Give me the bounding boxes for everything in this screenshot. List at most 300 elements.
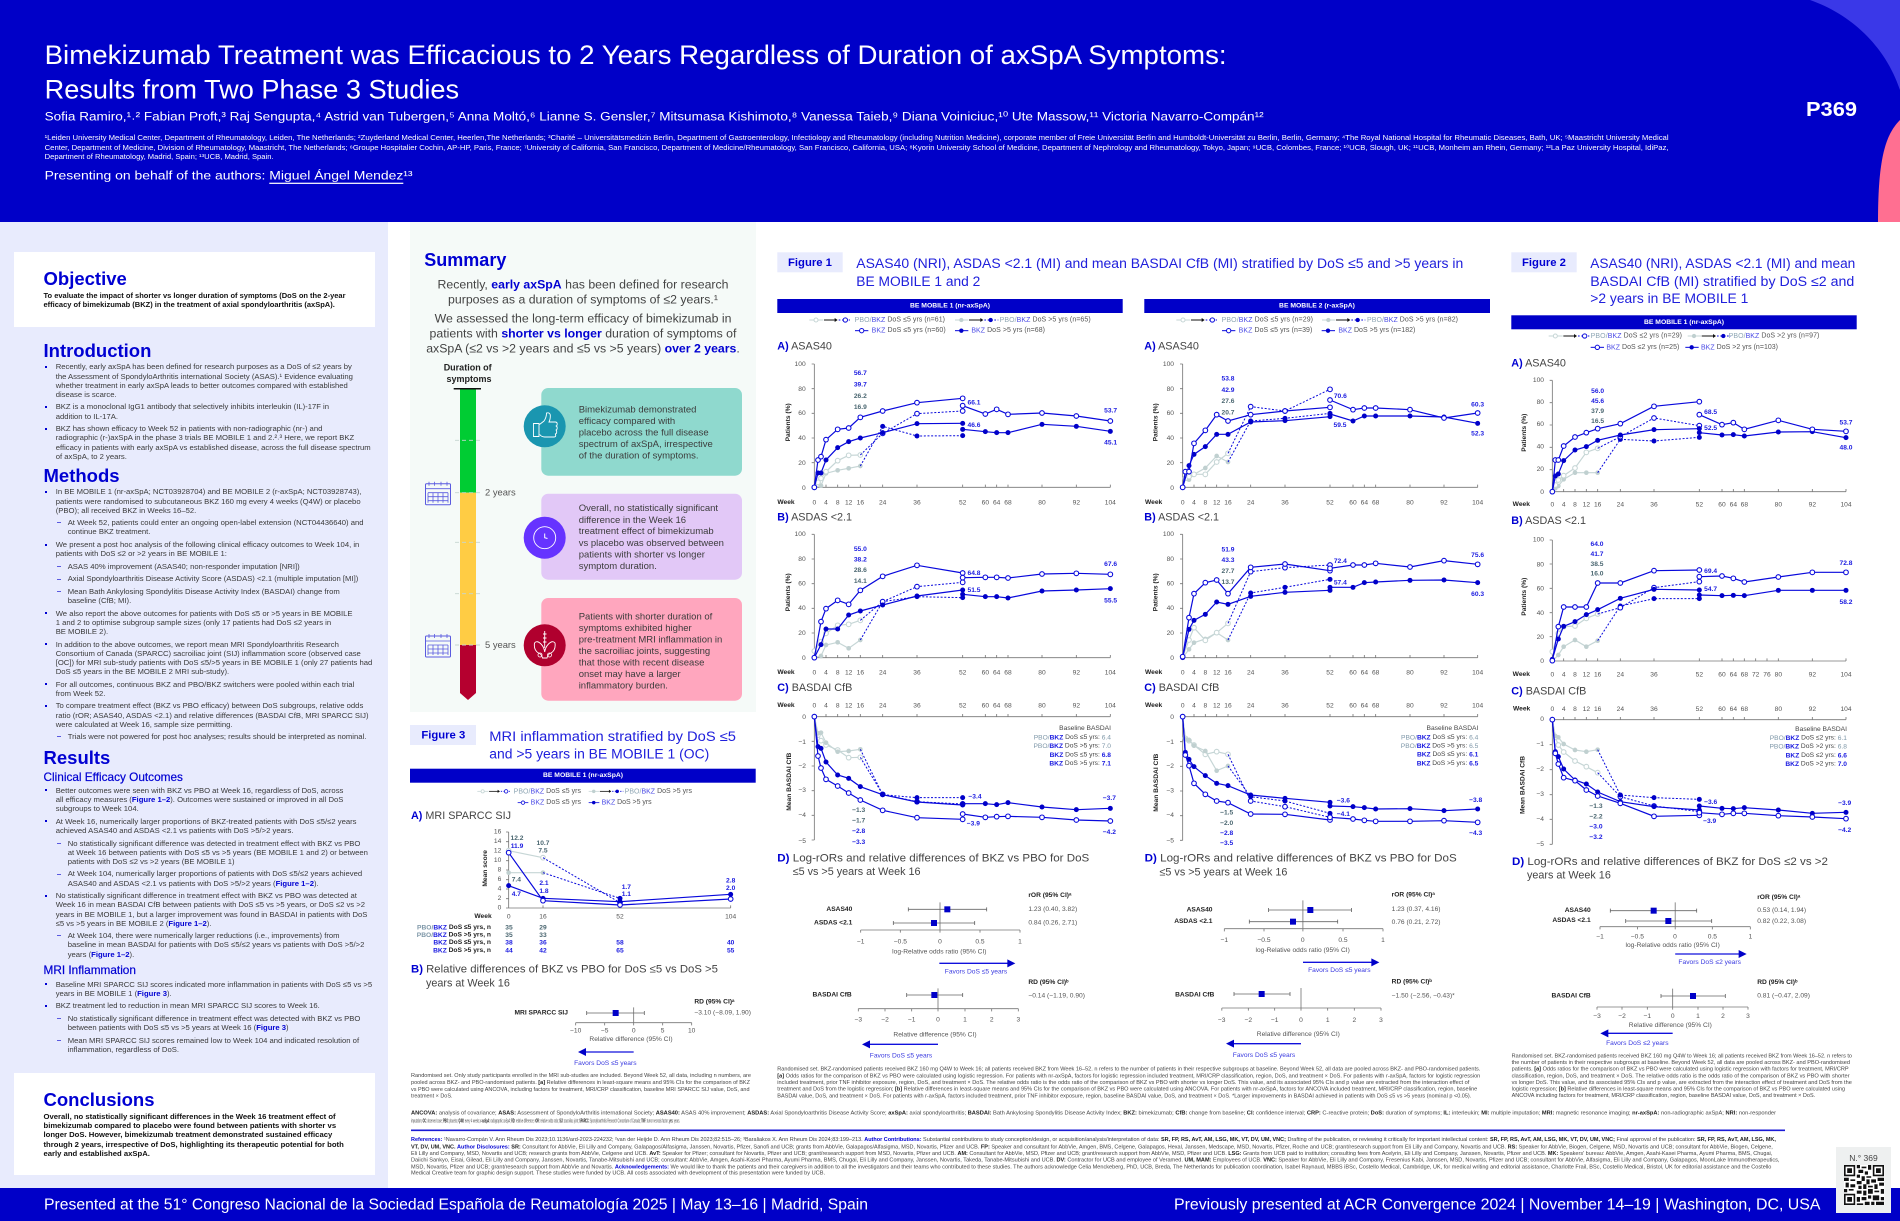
chart: fig 1 BE MOBILE 1 ASDAS: 24	[879, 669, 887, 676]
chart: fig 1 BE MOBILE 1 ASAS40: 20	[798, 460, 806, 467]
figure 1 title	[856, 256, 1463, 289]
forest plot: fig 1 BE MOBILE 1: ASAS40	[826, 906, 853, 913]
figure 1 tag	[777, 252, 843, 272]
chart: fig 2 ASAS40: 12	[1583, 501, 1590, 508]
references and disclosures	[411, 1137, 1780, 1177]
chart: fig 2 BASDAI: PBO/BKZ DoS ≤2 yrs: 6.1	[1770, 734, 1847, 741]
forest plot: fig 1 BE MOBILE 2: Relative difference (95% CI)	[1257, 1031, 1340, 1038]
forest plot: figure 2: −3	[1593, 1012, 1601, 1019]
chart: fig 1 BE MOBILE 1 ASAS40: 66.1	[968, 399, 981, 406]
callout: efficacy: placebo across the full disease	[579, 428, 709, 438]
forest plot: fig 1 BE MOBILE 1: ASDAS <2.1	[814, 919, 853, 926]
figure 3 title: MRI inflammation stratified by DoS ≤5	[489, 729, 736, 744]
footnote: figure 3: vs PBO were calculated using ANCOVA, including factors for treatment, MRI/CRP classification, baseline MRI SPARCC SIJ value, DoS, and	[411, 1087, 750, 1093]
chart: fig 1 BE MOBILE 1 ASDAS: 4	[824, 669, 828, 676]
chart: fig 2 BASDAI: BKZ DoS >2 yrs: 7.0	[1785, 760, 1847, 767]
chart: fig 2 ASDAS: 58.2	[1840, 599, 1853, 606]
chart: fig 1 BE MOBILE 2 BASDAI: 16	[1224, 702, 1232, 709]
table: n per group	[417, 924, 735, 954]
forest plot: figure 3: −5	[601, 1027, 609, 1034]
chart: fig 2 ASDAS: 72	[1752, 671, 1760, 678]
chart: fig 2 ASDAS: 40	[1537, 610, 1544, 617]
chart: fig 1 BE MOBILE 2 ASDAS: 72.4	[1334, 558, 1347, 565]
chart: MRI SPARCC SIJ: 7.4	[512, 876, 521, 883]
chart: fig 1 BE MOBILE 2 BASDAI: −3.5	[1220, 840, 1234, 847]
chart: fig 1 BE MOBILE 2 ASAS40: 20	[1167, 460, 1174, 467]
chart: fig 1 BE MOBILE 1 ASDAS: 64.8	[968, 570, 981, 577]
forest plot: fig 1 BE MOBILE 1: 3	[1016, 1016, 1020, 1023]
chart: fig 1 BE MOBILE 2 ASAS40: 20.7	[1222, 409, 1235, 416]
legend: figure 3	[477, 788, 692, 806]
forest plot: figure 3: Relative difference (95% CI)	[589, 1036, 673, 1043]
forest plot: figure 2: 3	[1746, 1012, 1750, 1019]
chart: fig 1 BE MOBILE 1 BASDAI: −2.8	[852, 828, 866, 835]
forest plot: fig 1 BE MOBILE 2: −2	[1245, 1016, 1252, 1023]
chart: MRI SPARCC SIJ: 2.1	[539, 880, 549, 887]
panel: summary background	[410, 222, 756, 712]
forest plot: fig 1 BE MOBILE 1: 1	[1018, 938, 1022, 945]
chart: fig 2 ASAS40: Week	[1513, 501, 1530, 508]
text: clinical efficacy bullets: all efficacy measures (Figure 1–2). Outcomes were sustained or improved in all DoS	[56, 795, 343, 804]
chart: fig 2 ASDAS: 64.0	[1591, 541, 1604, 548]
forest plot: fig 1 BE MOBILE 2: 0	[1299, 1016, 1303, 1023]
affiliations	[45, 135, 1669, 161]
timeline: duration of symptoms: symptoms	[446, 374, 492, 384]
chart: fig 1 BE MOBILE 2 BASDAI: −3.6	[1337, 797, 1350, 804]
footnote: figure 1: treatment and DoS from the logistic regression; [b] Relative differences in least-square means and 95% CIs for the comparison of BKZ vs PBO were calculated using ANCOVA. For patients with nr-axSpA, factors for ANCOVA included treatment, MRI/CRP classification, region, baseline	[777, 1087, 1477, 1093]
chart: fig 2 ASAS40: 56.0	[1591, 388, 1604, 395]
table: n per group: 42	[539, 947, 547, 954]
text: methods bullets: from Week 52.	[56, 689, 105, 698]
chart: fig 1 BE MOBILE 1 ASDAS: 52	[959, 669, 967, 676]
footnote: figure 2: Randomised set. BKZ-randomised patients received BKZ 160 mg Q4W to Week 16; all patients received BKZ from Week 16–52. n refers to	[1512, 1053, 1852, 1059]
chart: MRI SPARCC SIJ: 1.8	[539, 888, 549, 895]
legend: figure 2: PBO/BKZ DoS ≤2 yrs (n=29)	[1591, 332, 1682, 339]
text: methods bullets: ratio (rOR; ASAS40, ASDAS <2.1) and relative differences (BASDAI CfB, MRI SPARCC SIJ)	[56, 711, 369, 720]
chart: MRI SPARCC SIJ: 52	[616, 913, 624, 920]
heading: fig 2 A ASAS40: A) ASAS40	[1511, 357, 1566, 369]
legend: BE MOBILE 1: BKZ DoS >5 yrs (n=68)	[971, 327, 1045, 334]
text: clinical efficacy bullets: ≤5 vs >5 years in BE MOBILE 2 (Figure 1–2).	[56, 919, 211, 928]
text: methods bullets: We present a post hoc analysis of the following clinical efficacy outcomes to Week 104, in	[56, 540, 359, 549]
chart: fig 1 BE MOBILE 2 BASDAI: 24	[1247, 702, 1255, 709]
forest plot: figure 2: 1	[1696, 1012, 1700, 1019]
chart: fig 1 BE MOBILE 2 ASAS40: 60.3	[1471, 401, 1484, 408]
footnote: figure 2: logistic regression; [b] Relative differences in least-square means and 95% CIs for the comparison of BKZ vs PBO were calculated using	[1512, 1086, 1845, 1092]
heading: mobile 2 D forest: D) Log-rORs and relative differences of BKZ vs PBO for DoS	[1145, 853, 1457, 865]
forest plot: figure 3: Favors DoS ≤5 years	[574, 1060, 637, 1067]
chart: fig 2 BASDAI: −5	[1536, 841, 1544, 848]
chart: fig 1 BE MOBILE 2 ASDAS: 12	[1213, 669, 1221, 676]
heading: MRI inflammation: MRI Inflammation	[44, 963, 136, 977]
chart: fig 2 ASAS40: Patients (%)	[1521, 414, 1528, 452]
chart: fig 2 ASAS40: 104	[1840, 501, 1852, 508]
banner: figure 2 BE MOBILE 1: BE MOBILE 1 (nr-axSpA)	[1644, 319, 1724, 326]
chart: MRI SPARCC SIJ: 10	[494, 857, 502, 864]
forest plot: figure 2: 2	[1721, 1012, 1725, 1019]
chart: fig 1 BE MOBILE 1 BASDAI: Week	[777, 702, 795, 709]
chart: fig 1 BE MOBILE 2 BASDAI: 0	[1170, 714, 1174, 721]
figure 2 tag	[1511, 252, 1577, 272]
chart: fig 1 BE MOBILE 2 BASDAI: −3	[1166, 787, 1174, 794]
chart: fig 1 BE MOBILE 1 ASAS40: 12	[845, 499, 853, 506]
text: methods bullets: Consortium of Canada (SPARCC) sacroiliac joint (SIJ) inflammation score (observed case	[56, 649, 361, 658]
chart: fig 1 BE MOBILE 1 ASAS40: 60	[982, 499, 989, 506]
chart: fig 2 ASDAS: 72.8	[1840, 560, 1853, 567]
text: clinical efficacy bullets	[45, 786, 368, 959]
legend: figure 3: BKZ DoS >5 yrs	[602, 799, 652, 806]
text: methods bullets: continue BKZ treatment.	[68, 527, 150, 536]
text: methods bullets: baseline (CfB; MI).	[68, 596, 131, 605]
chart: fig 1 BE MOBILE 1 ASDAS: 80	[1038, 669, 1046, 676]
footnote: figure 1: BASDAI value, DoS, and treatment × DoS. For patients with r-axSpA, factors included treatment, prior TNF inhibitor exposure, region, baseline BASDAI value, DoS, and treatment × DoS. *Larger improvements in BASDAI achieved in patients with DoS ≤5 vs >5 years (nominal p <0.05).	[777, 1093, 1471, 1099]
forest plot: figure 2: 0.82 (0.22, 3.08)	[1757, 918, 1806, 925]
heading: fig 3 B forest: B) Relative differences of BKZ vs PBO for DoS ≤5 vs DoS >5	[411, 963, 718, 975]
forest plot: fig 1 BE MOBILE 2: 1	[1381, 936, 1385, 943]
chart: fig 2 ASAS40: 24	[1617, 501, 1624, 508]
forest plot: fig 1 BE MOBILE 1: rOR (95% CI)ᵃ	[1028, 892, 1072, 899]
chart: fig 2 BASDAI: BKZ DoS ≤2 yrs: 6.6	[1786, 752, 1847, 759]
chart: fig 2 ASAS40: 60	[1537, 421, 1544, 428]
chart: fig 2 BASDAI: 36	[1650, 705, 1658, 712]
banner: figure 3 BE MOBILE 1: BE MOBILE 1 (nr-axSpA)	[543, 772, 623, 779]
table: n per group: 40	[727, 939, 735, 946]
text: summary introduction: axSpA (≤2 vs >2 years and ≤5 vs >5 years) over 2 years.	[426, 341, 740, 355]
chart: fig 1 BE MOBILE 1 BASDAI: 80	[1038, 702, 1046, 709]
forest plot: figure 2: −1	[1596, 933, 1604, 940]
heading: fig 2 D forest: years at Week 16	[1527, 870, 1611, 882]
chart: fig 2 ASDAS: 68	[1741, 671, 1748, 678]
chart: fig 2 ASDAS: 8	[1573, 671, 1577, 678]
chart: fig 2 ASAS40	[1513, 377, 1853, 508]
table: n per group: 38	[505, 939, 513, 946]
chart: MRI SPARCC SIJ: 12	[494, 847, 502, 854]
chart: fig 1 BE MOBILE 1 ASDAS: 28.6	[854, 567, 867, 574]
chart: fig 2 ASAS40: 60	[1718, 501, 1726, 508]
chart: fig 1 BE MOBILE 1 ASAS40: 0	[812, 499, 816, 506]
chart: fig 2 ASAS40: 68	[1741, 501, 1748, 508]
abbreviations: imputation; OC: observed case; PBO: placebo; Q4W: every 4 weeks; r-axSpA: radiographic axSpA; RD: relative difference; rOR: relative odds ratio; SIJ: sacroiliac joint; SPARCC: Spondyloarthritis Research Consortium of Canada; TNF: tumor necrosis factor; yrs: years.	[411, 1118, 680, 1124]
text: methods bullets: Axial Spondyloarthritis Disease Activity Score (ASDAS) <2.1 (multiple imputation [MI])	[68, 574, 358, 583]
title: Bimekizumab Treatment was Efficacious to 2 Years Regardless of Duration of axSpA Symptoms:	[45, 40, 1227, 70]
chart: fig 1 BE MOBILE 2 ASAS40: 92	[1440, 499, 1448, 506]
forest plot: figure 2: −2	[1618, 1012, 1626, 1019]
text: clinical efficacy bullets: ASAS40 and ASDAS <2.1 vs patients with DoS >5/>2 years (Figure 1–2).	[68, 879, 319, 888]
text: clinical efficacy bullets: years (Figure 1–2).	[68, 950, 134, 959]
heading: mobile 2 C BASDAI: C) BASDAI CfB	[1144, 682, 1219, 694]
references and disclosures: VT, DV, UM, VNC. Author Disclosures: SR: Consultant for AbbVie, Eli Lilly and Company, Galapagos/Alfasigma, Janssen, Novartis, Pfizer, Sanofi and UCB; grants from AbbVie, Galapagos/Alfasigma, MSD, Novartis, Pfizer and UCB. FP: Speaker and consultant for AbbVie, Amgen, BMS, Celgene, Galapagos, Hexal, Janssen, Medscape, MSD, Novartis, Pfizer, Roche and UCB; grant/research support from Eli Lilly and Company, Novartis and UCB. RS: Speaker for AbbVie, Biogen, Celgene, MSD, Novartis and UCB; consultant for AbbVie, Biogen, Celgene,	[411, 1144, 1773, 1150]
forest plot: fig 1 BE MOBILE 1: 0.5	[975, 938, 985, 945]
chart: fig 2 ASAS40: 64	[1730, 501, 1737, 508]
heading: fig 1 D forest: D) Log-rORs and relative differences of BKZ vs PBO for DoS	[777, 853, 1089, 865]
chart: fig 1 BE MOBILE 1 ASDAS: 38.2	[854, 556, 867, 563]
heading: fig 1 C BASDAI: C) BASDAI CfB	[777, 682, 852, 694]
table: n per group: 55	[727, 947, 735, 954]
forest plot: figure 3: 10	[688, 1027, 696, 1034]
chart: fig 1 BE MOBILE 2 BASDAI: −4.3	[1469, 830, 1483, 837]
text: methods bullets: ASAS 40% improvement (ASAS40; non-responder imputation [NRI])	[68, 562, 300, 571]
forest plot: fig 1 BE MOBILE 1: 0.84 (0.26, 2.71)	[1028, 919, 1077, 926]
chart: fig 1 BE MOBILE 1 ASAS40: 26.2	[854, 393, 867, 400]
chart: fig 2 BASDAI: 0	[1540, 716, 1544, 723]
chart: fig 1 BE MOBILE 2 ASAS40: 60	[1167, 410, 1174, 417]
chart: fig 1 BE MOBILE 2 BASDAI: 104	[1472, 702, 1484, 709]
presenting author: Presenting on behalf of the authors: Miguel Ángel Mendez ¹³	[45, 168, 413, 183]
chart: fig 1 BE MOBILE 2 ASAS40: 4	[1192, 499, 1196, 506]
footnote: figure 2: ANCOVA including factors for treatment, MRI/CRP classification, region, baseline BASDAI value, DoS, and treatment × DoS.	[1512, 1093, 1815, 1099]
chart: fig 1 BE MOBILE 2 BASDAI	[1145, 702, 1484, 847]
footnote: figure 1	[777, 1067, 1480, 1099]
chart: fig 2 ASAS40: 37.9	[1591, 408, 1604, 415]
footer band	[0, 1188, 1900, 1221]
legend: BE MOBILE 2: PBO/BKZ DoS >5 yrs (n=82)	[1367, 316, 1458, 323]
table: n per group: 35	[505, 924, 513, 931]
forest plot: figure 2: Relative difference (95% CI)	[1629, 1022, 1712, 1029]
table: n per group: 58	[616, 939, 624, 946]
chart: fig 2 BASDAI: Week	[1513, 705, 1531, 712]
chart: fig 1 BE MOBILE 1 ASDAS: 0	[812, 669, 816, 676]
chart: MRI SPARCC SIJ: 16	[539, 913, 547, 920]
banner: BE MOBILE 1: BE MOBILE 1 (nr-axSpA)	[910, 302, 990, 310]
chart: fig 1 BE MOBILE 1 BASDAI: PBO/BKZ DoS ≤5 yrs: 6.4	[1034, 734, 1111, 741]
forest plot: figure 3	[514, 998, 751, 1067]
chart: fig 1 BE MOBILE 1 ASDAS: 68	[1004, 669, 1012, 676]
chart: MRI SPARCC SIJ: 4	[498, 885, 502, 892]
chart: fig 2 ASDAS: 16	[1594, 671, 1602, 678]
chart: fig 2 BASDAI: 60	[1718, 705, 1726, 712]
chart: fig 2 BASDAI: 8	[1573, 705, 1577, 712]
text: MRI inflammation bullets: Baseline MRI SPARCC SIJ scores indicated more inflammation in patients with DoS ≤5 vs >5	[56, 980, 372, 988]
footnote: figure 2: vs longer DoS. This value, and its associated 95% CIs and p value, are extracted from the interaction effect of treatment and DoS from the	[1512, 1080, 1852, 1086]
chart: fig 1 BE MOBILE 1 ASAS40: 60	[798, 410, 806, 417]
chart: fig 1 BE MOBILE 1 BASDAI: BKZ DoS ≤5 yrs: 6.8	[1050, 751, 1111, 758]
references and disclosures: MSD, Novartis, Pfizer and UCB; grant/research support from AbbVie and Novartis. Acknowledgements: We would like to thank the patients and their caregivers in addition to all the investigators and their teams who contributed to these studies. The authors acknowledge Celia Menckeberg, PhD, UCB, Breda, The Netherlands for publication coordination, Isabel Raynaud, MBBS iBSc, Costello Medical, Cambridge, UK, for medical writing and editorial assistance, Charlotte Frail, BSc, Costello Medical, Bristol, UK for editorial assistance and the Costello	[411, 1164, 1771, 1170]
chart: MRI SPARCC SIJ	[474, 828, 737, 920]
chart: fig 1 BE MOBILE 2 ASAS40: 70.6	[1334, 393, 1347, 400]
text: clinical efficacy bullets: At Week 104, numerically larger proportions of patients with DoS ≤5/≤2 years achieved	[68, 869, 362, 878]
chart: fig 1 BE MOBILE 1 ASAS40: 0	[802, 485, 806, 492]
chart: fig 1 BE MOBILE 1 BASDAI: PBO/BKZ DoS >5 yrs: 7.0	[1033, 742, 1111, 749]
text: introduction bullets	[45, 362, 371, 461]
heading: mobile 2 A ASAS40: A) ASAS40	[1144, 341, 1199, 353]
forest plot: fig 1 BE MOBILE 2: −1.50 (−2.56, −0.43)*	[1392, 992, 1455, 999]
chart: fig 1 BE MOBILE 1 BASDAI: −1	[798, 739, 806, 746]
chart: fig 1 BE MOBILE 1 BASDAI: 12	[845, 702, 853, 709]
text: MRI inflammation bullets: years in BE MOBILE 1 (Figure 3).	[56, 989, 172, 998]
chart: fig 1 BE MOBILE 1 BASDAI: 36	[913, 702, 921, 709]
forest plot: fig 1 BE MOBILE 1: Relative difference (95% CI)	[893, 1031, 977, 1038]
chart: fig 1 BE MOBILE 1 ASDAS	[777, 531, 1117, 676]
text: clinical efficacy bullets: baseline in mean BASDAI for patients with DoS ≤5/≤2 years vs patients with DoS >5/>2	[68, 940, 364, 949]
chart: fig 1 BE MOBILE 1 ASDAS: 55.5	[1104, 597, 1117, 604]
legend: BE MOBILE 1: PBO/BKZ DoS >5 yrs (n=65)	[1000, 316, 1091, 323]
references and disclosures: Eli Lilly and Company, MSD, Novartis and UCB; research grants from AbbVie, Celgene and UCB. AvT: Speaker for Pfizer; consultant for Novartis, Pfizer and UCB; grant/research support from MSD, Novartis, Pfizer and UCB. AM: Consultant for AbbVie, MSD, Pfizer and UCB; grant/research support from AbbVie, MSD, Pfizer and UCB. LSG: Grants from UCB paid to institution; consulting fees from Acelyrin, Eli Lilly and Company, Janssen, Novartis, Pfizer and UCB. MK: Speakers' bureau: AbbVie, Amgen, Asahi-Kasei Pharma, Ayumi Pharma, BMS, Chugai,	[411, 1151, 1773, 1157]
chart: fig 2 ASAS40: 20	[1537, 466, 1544, 473]
abbreviations	[411, 1110, 1776, 1124]
text: introduction bullets: BKZ is a monoclonal IgG1 antibody that selectively inhibits interleukin (IL)-17F in	[56, 402, 329, 411]
forest plot: fig 1 BE MOBILE 2: 2	[1352, 1016, 1356, 1023]
heading: methods: Methods	[44, 465, 120, 486]
chart: MRI SPARCC SIJ: 7.5	[538, 847, 548, 854]
forest plot: fig 1 BE MOBILE 1: −3	[855, 1016, 862, 1023]
chart: fig 2 BASDAI: −2.2	[1589, 813, 1603, 820]
heading: fig 3 B forest: years at Week 16	[426, 977, 510, 989]
chart: fig 2 ASDAS: 54.7	[1704, 586, 1717, 593]
heading: summary: Summary	[424, 250, 506, 270]
chart: fig 1 BE MOBILE 2 BASDAI: BKZ DoS ≤5 yrs: 6.1	[1417, 751, 1479, 758]
chart: fig 1 BE MOBILE 2 ASDAS: 60	[1349, 669, 1357, 676]
chart: fig 1 BE MOBILE 1 ASAS40: 24	[879, 499, 887, 506]
text: conclusions statement: bimekizumab compared to placebo were found between patients with shorter vs	[44, 1121, 336, 1130]
chart: fig 2 ASDAS: 36	[1650, 671, 1658, 678]
text: conclusions statement: Overall, no statistically significant differences in the Week 16 treatment effect of	[44, 1112, 336, 1121]
references and disclosures: References: ¹Navarro-Compán V. Ann Rheum Dis 2023;10.1136/ard-2023-224232; ²van der Heijde D. Ann Rheum Dis 2023;82:515–26; ³Baraliakos X. Ann Rheum Dis 2024;83:199–213. Author Contributions: Substantial contributions to study conception/design, or acquisition/analysis/interpretation of data: SR, FP, RS, AvT, AM, LSG, MK, VT, DV, UM, VNC; Drafting of the publication, or reviewing it critically for important intellectual content: SR, FP, RS, AvT, AM, LSG, MK, VT, DV, UM, VNC; Final approval of the publication: SR, FP, RS, AvT, AM, LSG, MK,	[411, 1137, 1776, 1143]
chart: fig 1 BE MOBILE 2 BASDAI: 4	[1192, 702, 1196, 709]
chart: MRI SPARCC SIJ: Week	[474, 913, 492, 920]
chart: fig 1 BE MOBILE 2 ASDAS: 8	[1203, 669, 1207, 676]
chart: fig 1 BE MOBILE 2 ASAS40: 80	[1167, 386, 1174, 393]
chart: fig 2 BASDAI: 80	[1775, 705, 1782, 712]
panel: objective	[14, 252, 375, 327]
text: methods bullets: Mean Bath Ankylosing Spondylitis Disease Activity Index (BASDAI) change from	[68, 587, 340, 596]
icon: calendar 2 years	[426, 482, 450, 505]
forest plot: fig 1 BE MOBILE 1	[812, 892, 1085, 1059]
chart: fig 1 BE MOBILE 2 ASDAS: 100	[1163, 531, 1174, 538]
chart: MRI SPARCC SIJ: Mean score	[482, 850, 489, 887]
heading: fig 3 A MRI: A) MRI SPARCC SIJ	[411, 810, 511, 822]
figure 3 tag: Figure 3	[421, 730, 465, 742]
chart: fig 1 BE MOBILE 1 ASDAS: Patients (%)	[785, 573, 792, 611]
chart: fig 1 BE MOBILE 2 BASDAI: −1.5	[1220, 809, 1234, 816]
chart: fig 2 ASDAS: 104	[1840, 671, 1852, 678]
chart: fig 1 BE MOBILE 1 ASDAS: 40	[798, 605, 806, 612]
chart: fig 1 BE MOBILE 2 ASDAS: 36	[1281, 669, 1289, 676]
forest plot: figure 2	[1551, 894, 1810, 1047]
chart: fig 2 BASDAI: Mean BASDAI CfB	[1519, 756, 1526, 814]
chart: fig 2 ASDAS: 38.5	[1591, 561, 1604, 568]
chart: fig 1 BE MOBILE 1 ASAS40: 100	[795, 361, 806, 368]
heading: mobile 2 B ASDAS: B) ASDAS <2.1	[1144, 511, 1219, 523]
chart: fig 2 ASDAS: 92	[1809, 671, 1816, 678]
text: summary introduction: Recently, early axSpA has been defined for research	[438, 278, 729, 292]
heading: fig 2 D forest	[1512, 856, 1828, 882]
chart: fig 1 BE MOBILE 1 ASAS40: 80	[1038, 499, 1046, 506]
legend: figure 2: BKZ DoS ≤2 yrs (n=25)	[1606, 344, 1679, 351]
banner: figure 3 BE MOBILE 1	[410, 769, 756, 783]
footnote: figure 1: [a] Odds ratios for the comparison of BKZ vs PBO were calculated using logistic regression. For patients with nr-axSpA, factors for logistic regression included treatment, MRI/CRP classification, region, DoS, and treatment × DoS. For patients with r-axSpA, factors for logistic regression	[777, 1073, 1480, 1079]
chart: fig 1 BE MOBILE 1 ASAS40: 104	[1105, 499, 1116, 506]
forest plot: fig 1 BE MOBILE 2: rOR (95% CI)ᵃ	[1392, 891, 1435, 898]
forest plot: fig 1 BE MOBILE 1: 0	[938, 938, 942, 945]
affiliations: ¹Leiden University Medical Center, Department of Rheumatology, Leiden, The Netherlands; ²Zuyderland Medical Center, Heerlen,The Netherlands; ³Charité – Universitätsmedizin Berlin, Department of Gastroenterology, Infectiology and Rheumatology (including Nutrition Medicine), corporate member of Freie Universität Berlin and Humboldt-Universität zu Berlin, Berlin, Germany; ⁴The Royal National Hospital for Rheumatic Diseases, Bath, UK; ⁵Maastricht University Medical	[45, 135, 1669, 142]
heading: conclusions: Conclusions	[44, 1089, 155, 1110]
QR code box: N.° 369	[1849, 1153, 1878, 1163]
text: introduction bullets: whether treatment in early axSpA leads to better outcomes compared with established	[56, 381, 348, 390]
forest plot: fig 1 BE MOBILE 1: −2	[881, 1016, 889, 1023]
table: n per group: 33	[539, 931, 547, 938]
chart: fig 1 BE MOBILE 2 ASDAS: Week	[1145, 669, 1163, 676]
forest plot: figure 2: 0	[1671, 1012, 1675, 1019]
chart: fig 2 ASAS40: 100	[1533, 377, 1544, 384]
text: clinical efficacy bullets: Week 16 in mean BASDAI CfB between patients with DoS ≤5 vs >5 years, or DoS ≤2 vs >2	[56, 900, 365, 909]
callout: inflammation: the sacroiliac joints, suggesting	[579, 646, 710, 657]
chart: fig 1 BE MOBILE 2 ASDAS: 57.4	[1334, 579, 1347, 586]
forest plot: figure 2: 0.5	[1708, 933, 1717, 940]
forest plot: figure 2: BASDAI CfB	[1551, 992, 1591, 999]
forest plot: figure 3: 5	[661, 1027, 665, 1034]
text: MRI inflammation bullets: between patients with DoS ≤5 vs >5 years at Week 16 (Figure 3)	[68, 1023, 289, 1032]
chart: fig 2 ASAS40: 80	[1775, 501, 1782, 508]
callout: inflammation: symptoms exhibited higher	[579, 623, 692, 634]
chart: fig 2 ASDAS	[1513, 536, 1853, 678]
forest plot: figure 3: 0	[632, 1027, 636, 1034]
text: methods bullets: BE MOBILE 2).	[56, 627, 108, 636]
figure 2 title: ASAS40 (NRI), ASDAS <2.1 (MI) and mean	[1590, 256, 1855, 271]
forest plot: fig 1 BE MOBILE 2	[1174, 891, 1455, 1059]
forest plot: figure 2: log-Relative odds ratio (95% CI)	[1625, 942, 1720, 949]
chart: fig 1 BE MOBILE 1 ASAS40: 16	[857, 499, 864, 506]
chart: fig 1 BE MOBILE 2 ASAS40: 52	[1326, 499, 1334, 506]
footnote: figure 1: included treatment, prior TNF inhibitor exposure, region, DoS, and treatment × DoS. The relative odds ratio is the odds ratio of the comparison of BKZ vs PBO with shorter vs longer DoS. This value, and its associated 95% CIs and p value are extracted from the interaction effect of	[777, 1080, 1470, 1086]
banner: BE MOBILE 2	[1144, 299, 1490, 313]
forest plot: fig 1 BE MOBILE 2: 0	[1301, 936, 1305, 943]
legend: BE MOBILE 2	[1176, 316, 1458, 334]
chart: fig 1 BE MOBILE 1 BASDAI: 104	[1105, 702, 1116, 709]
timeline: duration of symptoms	[444, 362, 516, 700]
chart: fig 2 ASDAS: 52	[1696, 671, 1703, 678]
chart: fig 2 BASDAI: −3.9	[1703, 818, 1717, 825]
panel: conclusions	[14, 1073, 375, 1175]
forest plot: fig 1 BE MOBILE 2: Favors DoS ≤5 years	[1308, 967, 1371, 974]
table: n per group: 29	[539, 924, 547, 931]
chart: fig 2 ASAS40: 92	[1809, 501, 1816, 508]
chart: fig 1 BE MOBILE 2 ASDAS: 0	[1170, 655, 1174, 662]
forest plot: figure 2: 0.81 (−0.47, 2.09)	[1757, 992, 1810, 999]
chart: fig 1 BE MOBILE 2 ASAS40: 24	[1247, 499, 1255, 506]
heading: fig 1 B ASDAS: B) ASDAS <2.1	[777, 511, 852, 523]
title: Results from Two Phase 3 Studies	[45, 74, 459, 104]
legend: BE MOBILE 1: BKZ DoS ≤5 yrs (n=60)	[872, 327, 946, 334]
chart: fig 1 BE MOBILE 2 ASAS40: 8	[1203, 499, 1207, 506]
chart: fig 1 BE MOBILE 2 BASDAI: −4.1	[1337, 811, 1350, 818]
chart: fig 2 ASAS40: 53.7	[1840, 419, 1853, 426]
chart: fig 1 BE MOBILE 2 BASDAI: 68	[1372, 702, 1380, 709]
chart: fig 1 BE MOBILE 2 ASDAS: 68	[1372, 669, 1380, 676]
chart: fig 2 BASDAI: −3	[1536, 791, 1544, 798]
forest plot: figure 3: MRI SPARCC SIJ	[514, 1009, 568, 1016]
chart: fig 1 BE MOBILE 1 BASDAI: −1.3	[852, 807, 866, 814]
callout: no difference	[541, 494, 742, 580]
title	[45, 40, 1227, 104]
forest plot: fig 1 BE MOBILE 2: 1	[1326, 1016, 1330, 1023]
text: conclusions statement: early and established axSpA.	[44, 1149, 150, 1158]
forest plot: fig 1 BE MOBILE 1: 1	[963, 1016, 967, 1023]
callout: inflammation	[541, 598, 742, 701]
chart: fig 1 BE MOBILE 1 BASDAI	[777, 702, 1116, 846]
heading: fig 2 D forest: D) Log-rORs and relative differences of BKZ for DoS ≤2 vs >2	[1512, 856, 1828, 868]
chart: fig 1 BE MOBILE 2 BASDAI: 52	[1326, 702, 1334, 709]
heading: fig 3 B forest	[411, 963, 718, 989]
chart: fig 1 BE MOBILE 1 BASDAI: 92	[1073, 702, 1080, 709]
chart: fig 1 BE MOBILE 1 BASDAI: −3	[798, 787, 806, 794]
chart: fig 1 BE MOBILE 2 ASAS40	[1145, 361, 1484, 506]
chart: fig 2 ASDAS: 20	[1537, 634, 1544, 641]
heading: fig 2 C BASDAI: C) BASDAI CfB	[1511, 685, 1586, 697]
callout: no difference: vs placebo was observed between	[579, 538, 724, 549]
chart: fig 1 BE MOBILE 2 ASDAS: 13.7	[1222, 579, 1235, 586]
text: methods bullets: DoS ≤5 years in the BE MOBILE 2 MRI sub-study).	[56, 667, 229, 676]
chart: fig 2 ASDAS: 76	[1763, 671, 1771, 678]
